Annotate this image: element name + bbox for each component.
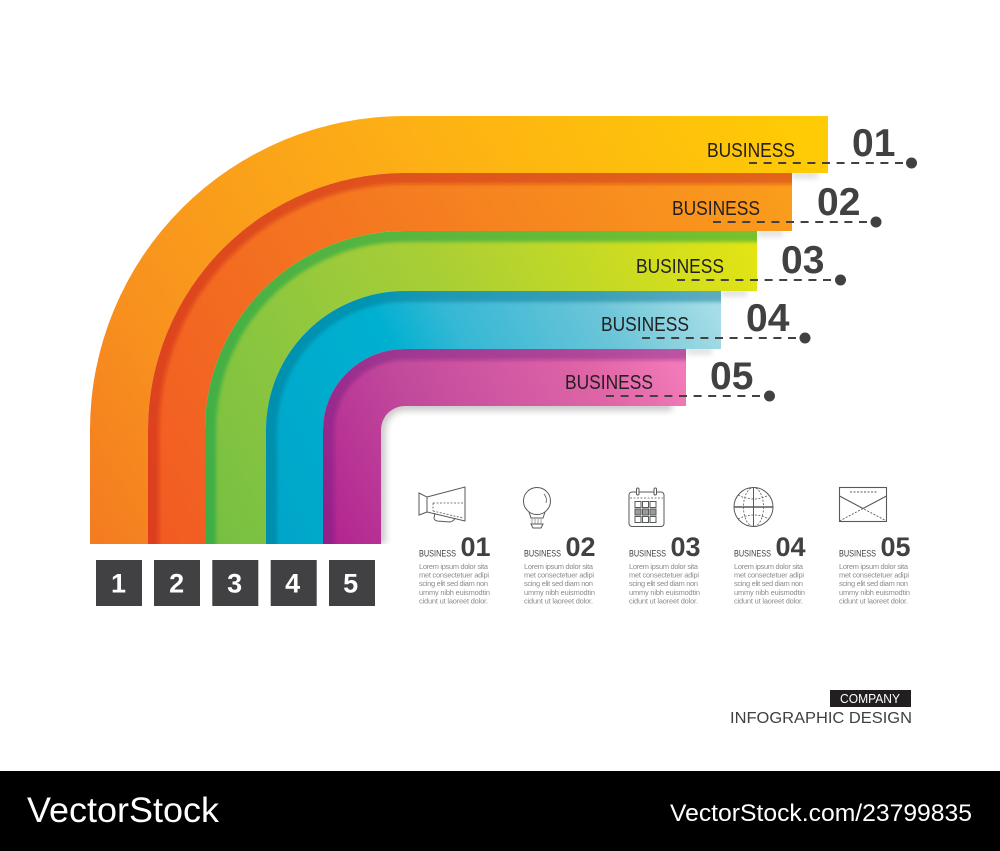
- footer bar: [0, 771, 1000, 851]
- square 2: 2: [169, 568, 184, 598]
- text block 05: met consectetuer adipi: [839, 571, 909, 580]
- text block 03: met consectetuer adipi: [629, 571, 699, 580]
- text block 01: [419, 532, 491, 605]
- text block 03: 03: [670, 532, 701, 562]
- callout 03: 03: [781, 239, 824, 282]
- text block 04: BUSINESS: [734, 549, 771, 559]
- icon: megaphone: [419, 487, 465, 522]
- text block 05: ummy nibh euismodtin: [839, 588, 910, 597]
- square 5: [329, 560, 375, 606]
- text block 05: BUSINESS: [839, 549, 876, 559]
- text block 02: met consectetuer adipi: [524, 571, 594, 580]
- square 2: [154, 560, 200, 606]
- text block 04: [734, 532, 806, 605]
- text block 01: Lorem ipsum dolor sita: [419, 562, 489, 571]
- square 5: 5: [343, 568, 358, 598]
- text block 05: 05: [880, 532, 911, 562]
- callout 04: 04: [746, 297, 790, 340]
- text block 01: cidunt ut laoreet dolor.: [419, 596, 488, 605]
- callout 02: [672, 181, 882, 228]
- text block 04: scing elit sed diam non: [734, 579, 803, 588]
- text block 01: 01: [460, 532, 491, 562]
- square 4: [271, 560, 317, 606]
- icon: calendar: [629, 488, 664, 526]
- text block 03: BUSINESS: [629, 549, 666, 559]
- text block 02: scing elit sed diam non: [524, 579, 593, 588]
- text block 01: ummy nibh euismodtin: [419, 588, 490, 597]
- callout 01: [707, 122, 917, 168]
- text block 03: ummy nibh euismodtin: [629, 588, 700, 597]
- text block 03: cidunt ut laoreet dolor.: [629, 596, 698, 605]
- callout 05: 05: [710, 355, 753, 398]
- band 5: magenta: [323, 349, 690, 548]
- text block 03: scing elit sed diam non: [629, 579, 698, 588]
- callout 03: [636, 239, 846, 286]
- callout 03: BUSINESS: [636, 256, 724, 278]
- icon: envelope: [840, 488, 886, 522]
- callout 05: [565, 355, 775, 402]
- callout 02: BUSINESS: [672, 198, 760, 220]
- square 3: [212, 560, 258, 606]
- number squares: [96, 560, 375, 606]
- text block 04: ummy nibh euismodtin: [734, 588, 805, 597]
- square 3: 3: [227, 568, 242, 598]
- callout 04: BUSINESS: [601, 314, 689, 336]
- text block 02: cidunt ut laoreet dolor.: [524, 596, 593, 605]
- text block 03: [629, 532, 701, 605]
- band 3: green-lime: [205, 231, 761, 548]
- text block 05: scing elit sed diam non: [839, 579, 908, 588]
- callout 01: BUSINESS: [707, 140, 795, 162]
- text block 05: [839, 532, 911, 605]
- band 1: yellow-orange: [90, 116, 828, 544]
- text block 01: BUSINESS: [419, 549, 456, 559]
- text block 02: BUSINESS: [524, 549, 561, 559]
- callout 01: 01: [852, 122, 895, 165]
- text block 02: 02: [566, 532, 596, 562]
- text block 02: Lorem ipsum dolor sita: [524, 562, 594, 571]
- text block 05: cidunt ut laoreet dolor.: [839, 596, 908, 605]
- text block 04: cidunt ut laoreet dolor.: [734, 596, 803, 605]
- icon: globe: [734, 488, 773, 526]
- text block 04: met consectetuer adipi: [734, 571, 804, 580]
- text block 03: Lorem ipsum dolor sita: [629, 562, 699, 571]
- text block 02: [524, 532, 596, 605]
- subtitle: infographic design: INFOGRAPHIC DESIGN: [730, 710, 912, 727]
- text block 04: Lorem ipsum dolor sita: [734, 562, 804, 571]
- text block 05: Lorem ipsum dolor sita: [839, 562, 909, 571]
- band 4: blue: [266, 291, 725, 548]
- square 1: 1: [111, 568, 126, 598]
- footer bar: VectorStock: [27, 791, 220, 830]
- callout 02: 02: [817, 181, 860, 224]
- callout 04: [601, 297, 810, 344]
- company tag: COMPANY: [840, 691, 900, 706]
- square 1: [96, 560, 142, 606]
- square 4: 4: [285, 568, 300, 598]
- text block 01: scing elit sed diam non: [419, 579, 488, 588]
- footer bar: VectorStock.com/23799835: [670, 800, 972, 827]
- band 2: orange-red: [148, 173, 796, 548]
- text block 04: 04: [776, 532, 806, 562]
- callout 05: BUSINESS: [565, 372, 653, 394]
- text block 01: met consectetuer adipi: [419, 571, 489, 580]
- panel: rainbow bands chart: [90, 116, 828, 548]
- icon: light bulb: [524, 488, 550, 528]
- text block 02: ummy nibh euismodtin: [524, 588, 595, 597]
